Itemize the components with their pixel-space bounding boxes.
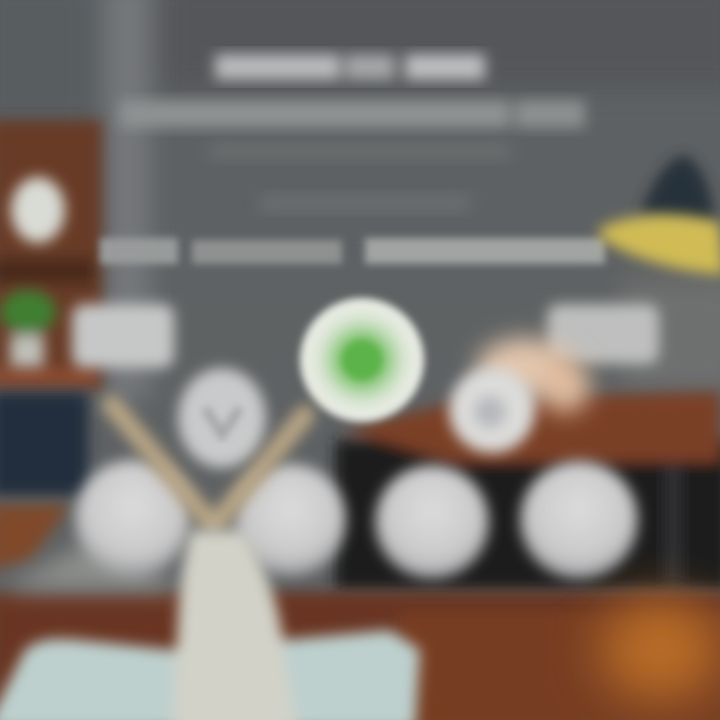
panel: dark cabinet <box>0 392 88 495</box>
circle item 4 <box>520 461 638 579</box>
icon: green check badge <box>300 298 424 422</box>
orange floor glow <box>600 600 720 700</box>
icon: potted plant <box>0 290 56 367</box>
right desk and dark lower area <box>335 392 720 590</box>
circle item 1 <box>75 460 191 576</box>
icon: small badge left <box>178 368 266 468</box>
icon: peach blob <box>477 338 590 413</box>
subtitle <box>210 142 510 160</box>
icon: small badge right <box>449 367 535 453</box>
grey wedge beside vase <box>0 530 180 590</box>
title: line two <box>120 100 585 128</box>
heading: section banner <box>100 238 605 264</box>
floor and table <box>0 505 720 720</box>
white vase <box>172 530 298 720</box>
white cloth <box>0 630 420 720</box>
icon: lamp <box>600 155 720 275</box>
label card: right <box>547 304 659 364</box>
circle item 2 <box>234 464 346 576</box>
label card: left <box>72 304 174 368</box>
circle item 3 <box>375 465 489 579</box>
caption line <box>260 194 470 212</box>
panel: wooden shelf <box>0 120 102 390</box>
icon: shelf clock <box>11 177 65 243</box>
title: line one <box>215 54 485 80</box>
diffuser sticks <box>112 405 305 525</box>
